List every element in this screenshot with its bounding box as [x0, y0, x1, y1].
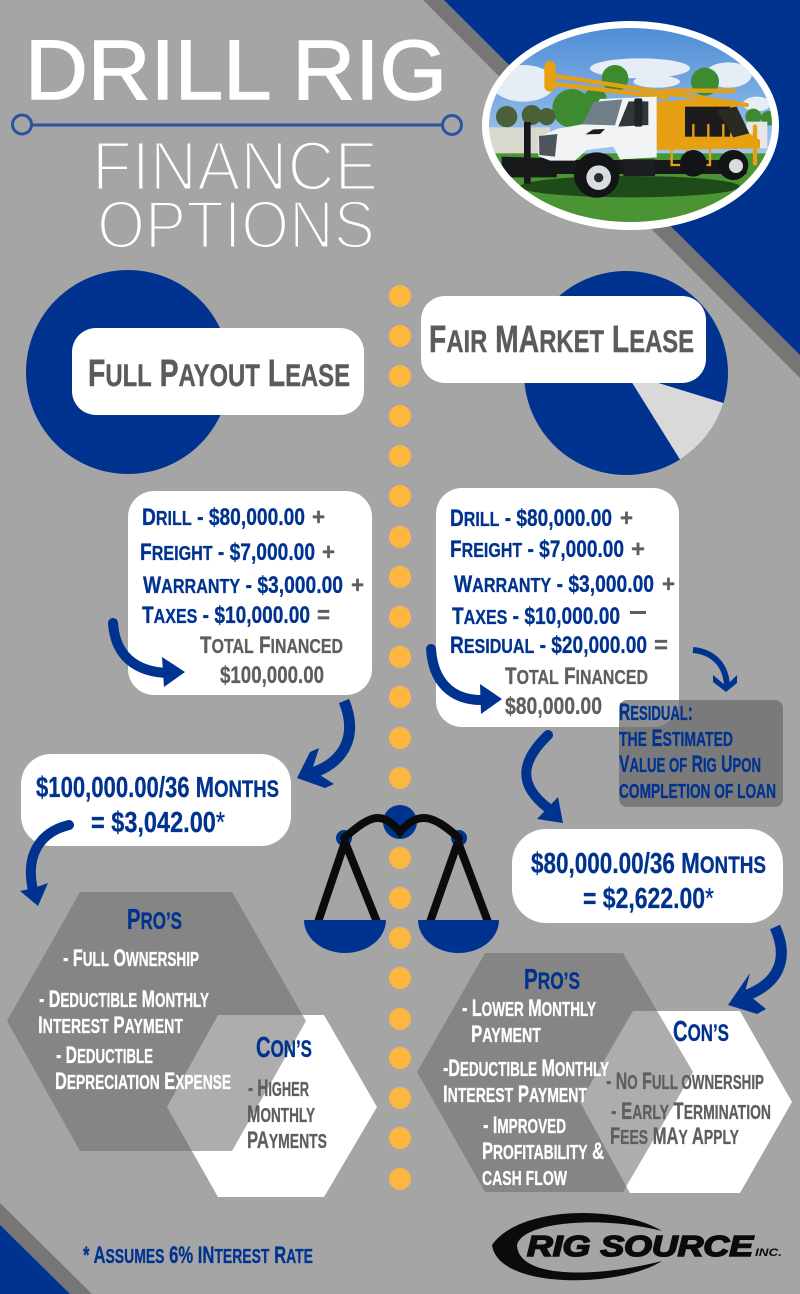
- payment bubble: full payout: = $3,042.00*: [91, 807, 225, 839]
- cons text, right: CON’S: [673, 1016, 729, 1048]
- icon: balance scale: [304, 805, 499, 953]
- panel: fair market cost breakdown: $80,000.00: [505, 693, 602, 720]
- footnote: * ASSUMES 6% INTEREST RATE: [83, 1242, 313, 1269]
- payment bubble: fair market: = $2,622.00*: [583, 883, 714, 915]
- pros text, left: PRO’S: [127, 904, 182, 936]
- cons text, left: CON’S: [256, 1032, 312, 1064]
- callout: residual definition: RESIDUAL:: [619, 699, 693, 726]
- panel: full payout cost breakdown: +: [322, 539, 335, 566]
- panel: full payout cost breakdown: +: [312, 504, 325, 531]
- pros text, left: - DEDUCTIBLE: [56, 1042, 153, 1069]
- title line: Options: OPTIONS: [97, 187, 375, 263]
- arrow: payment to cons, right: [728, 927, 781, 1014]
- panel: full payout cost breakdown: FREIGHT - $7,000.00: [140, 539, 315, 566]
- cab: [538, 97, 657, 161]
- cons text, left: [247, 1032, 327, 1154]
- panel: fair market cost breakdown: =: [654, 632, 668, 659]
- panel: full payout pros and cons: [7, 892, 377, 1197]
- flatbed and post: [524, 122, 531, 184]
- panel: full payout cost breakdown: +: [351, 572, 364, 599]
- pros text, left: DEPRECIATION EXPENSE: [55, 1068, 231, 1095]
- panel: full payout cost breakdown: [128, 491, 372, 695]
- arrow: total financed to payment, right: [526, 735, 563, 823]
- pros hexagon, right: [417, 953, 693, 1192]
- cons text, left: MONTHLY: [247, 1101, 315, 1128]
- panel: full payout cost breakdown: =: [317, 602, 330, 629]
- panel: full payout cost breakdown: $100,000.00: [220, 662, 324, 689]
- panel: fair market cost breakdown: RESIDUAL - $20,000.00: [450, 632, 647, 659]
- panel: fair market cost breakdown: FREIGHT - $7,000.00: [450, 536, 624, 563]
- pie: fair market: [524, 271, 728, 475]
- callout: residual definition: VALUE OF RIG UPON: [619, 751, 761, 778]
- payment bubble: fair market: [512, 829, 783, 923]
- photo: drill rig truck in oval frame: [480, 20, 780, 230]
- pros hexagon, left: [7, 892, 306, 1151]
- pros text, left: INTEREST PAYMENT: [38, 1012, 183, 1039]
- arrow: total financed to payment, left: [297, 701, 350, 788]
- title line: Drill Rig: DRILL RIG: [25, 23, 447, 117]
- cons hexagon, right: [580, 1011, 792, 1193]
- center dotted divider: [389, 285, 411, 1190]
- title line: Finance: FINANCE: [92, 127, 378, 205]
- arrow: into total financed, left: [113, 623, 185, 687]
- heading: Full Payout Lease: [72, 328, 364, 415]
- callout: residual definition: THE ESTIMATED: [619, 725, 733, 752]
- panel: fair market cost breakdown: TAXES - $10,000.00: [452, 603, 620, 630]
- pros text, left: [38, 904, 231, 1095]
- panel: full payout cost breakdown: DRILL - $80,000.00: [142, 504, 305, 531]
- panel: fair market cost breakdown: +: [620, 505, 633, 532]
- yellow bed: [657, 100, 760, 150]
- payment bubble: full payout: $100,000.00/36 MONTHS: [36, 772, 279, 804]
- cons text, left: PAYMENTS: [247, 1127, 327, 1154]
- panel: fair market cost breakdown: +: [662, 571, 675, 598]
- logo: Rig Source Inc.: RIG SOURCE: [527, 1231, 755, 1263]
- panel: full payout cost breakdown: WARRANTY - $3,000.00: [143, 572, 343, 599]
- panel: fair market cost breakdown: DRILL - $80,000.00: [450, 505, 612, 532]
- logo: Rig Source Inc.: INC.: [755, 1247, 782, 1259]
- arrow: residual to definition: [693, 650, 737, 692]
- heading: Fair Market Lease: [421, 296, 706, 383]
- panel: fair market cost breakdown: [436, 488, 679, 727]
- pros text, right: PROFITABILITY &: [482, 1138, 604, 1165]
- pros text, right: PRO’S: [524, 964, 580, 996]
- cons text, left: - HIGHER: [248, 1075, 309, 1102]
- panel: fair market cost breakdown: WARRANTY - $3,000.00: [454, 571, 654, 598]
- panel: fair market cost breakdown: +: [631, 536, 645, 563]
- title: [12, 23, 462, 263]
- pros text, right: - LOWER MONTHLY: [462, 995, 596, 1022]
- pros text, right: -DEDUCTIBLE MONTHLY: [443, 1055, 609, 1082]
- pros text, left: - FULL OWNERSHIP: [63, 945, 199, 972]
- callout: residual definition: [619, 699, 783, 807]
- payment bubble: full payout: [21, 754, 291, 846]
- panel: fair market pros and cons: [417, 953, 792, 1193]
- pros text, left: - DEDUCTIBLE MONTHLY: [39, 986, 209, 1013]
- cons hexagon, left: [167, 1015, 377, 1197]
- cons text, right: [606, 1016, 771, 1150]
- pros text, right: CASH FLOW: [482, 1168, 567, 1190]
- payment bubble: fair market: $80,000.00/36 MONTHS: [531, 848, 766, 880]
- panel: fair market cost breakdown: TOTAL FINANCED: [505, 663, 648, 690]
- pros text, right: - IMPROVED: [483, 1112, 566, 1139]
- arrow: payment to pros, left: [20, 825, 69, 906]
- wheels: [574, 152, 619, 198]
- heading: Full Payout Lease: FULL PAYOUT LEASE: [88, 353, 350, 395]
- corner decoration: bottom left: [0, 1203, 92, 1294]
- pros text, right: [443, 964, 609, 1190]
- arrow: into total financed, right: [431, 649, 502, 714]
- panel: full payout cost breakdown: TOTAL FINANCED: [200, 632, 343, 659]
- panel: full payout cost breakdown: TAXES - $10,000.00: [142, 602, 310, 629]
- pie: full payout: [26, 270, 230, 474]
- pros text, right: PAYMENT: [471, 1021, 541, 1048]
- logo: Rig Source Inc.: [492, 1213, 782, 1280]
- title divider with end circles: [12, 115, 462, 134]
- cons text, right: FEES MAY APPLY: [610, 1123, 739, 1150]
- heading: Fair Market Lease: FAIR MARKET LEASE: [429, 319, 694, 361]
- corner decoration: top right: [423, 0, 800, 378]
- pros text, right: INTEREST PAYMENT: [443, 1081, 587, 1108]
